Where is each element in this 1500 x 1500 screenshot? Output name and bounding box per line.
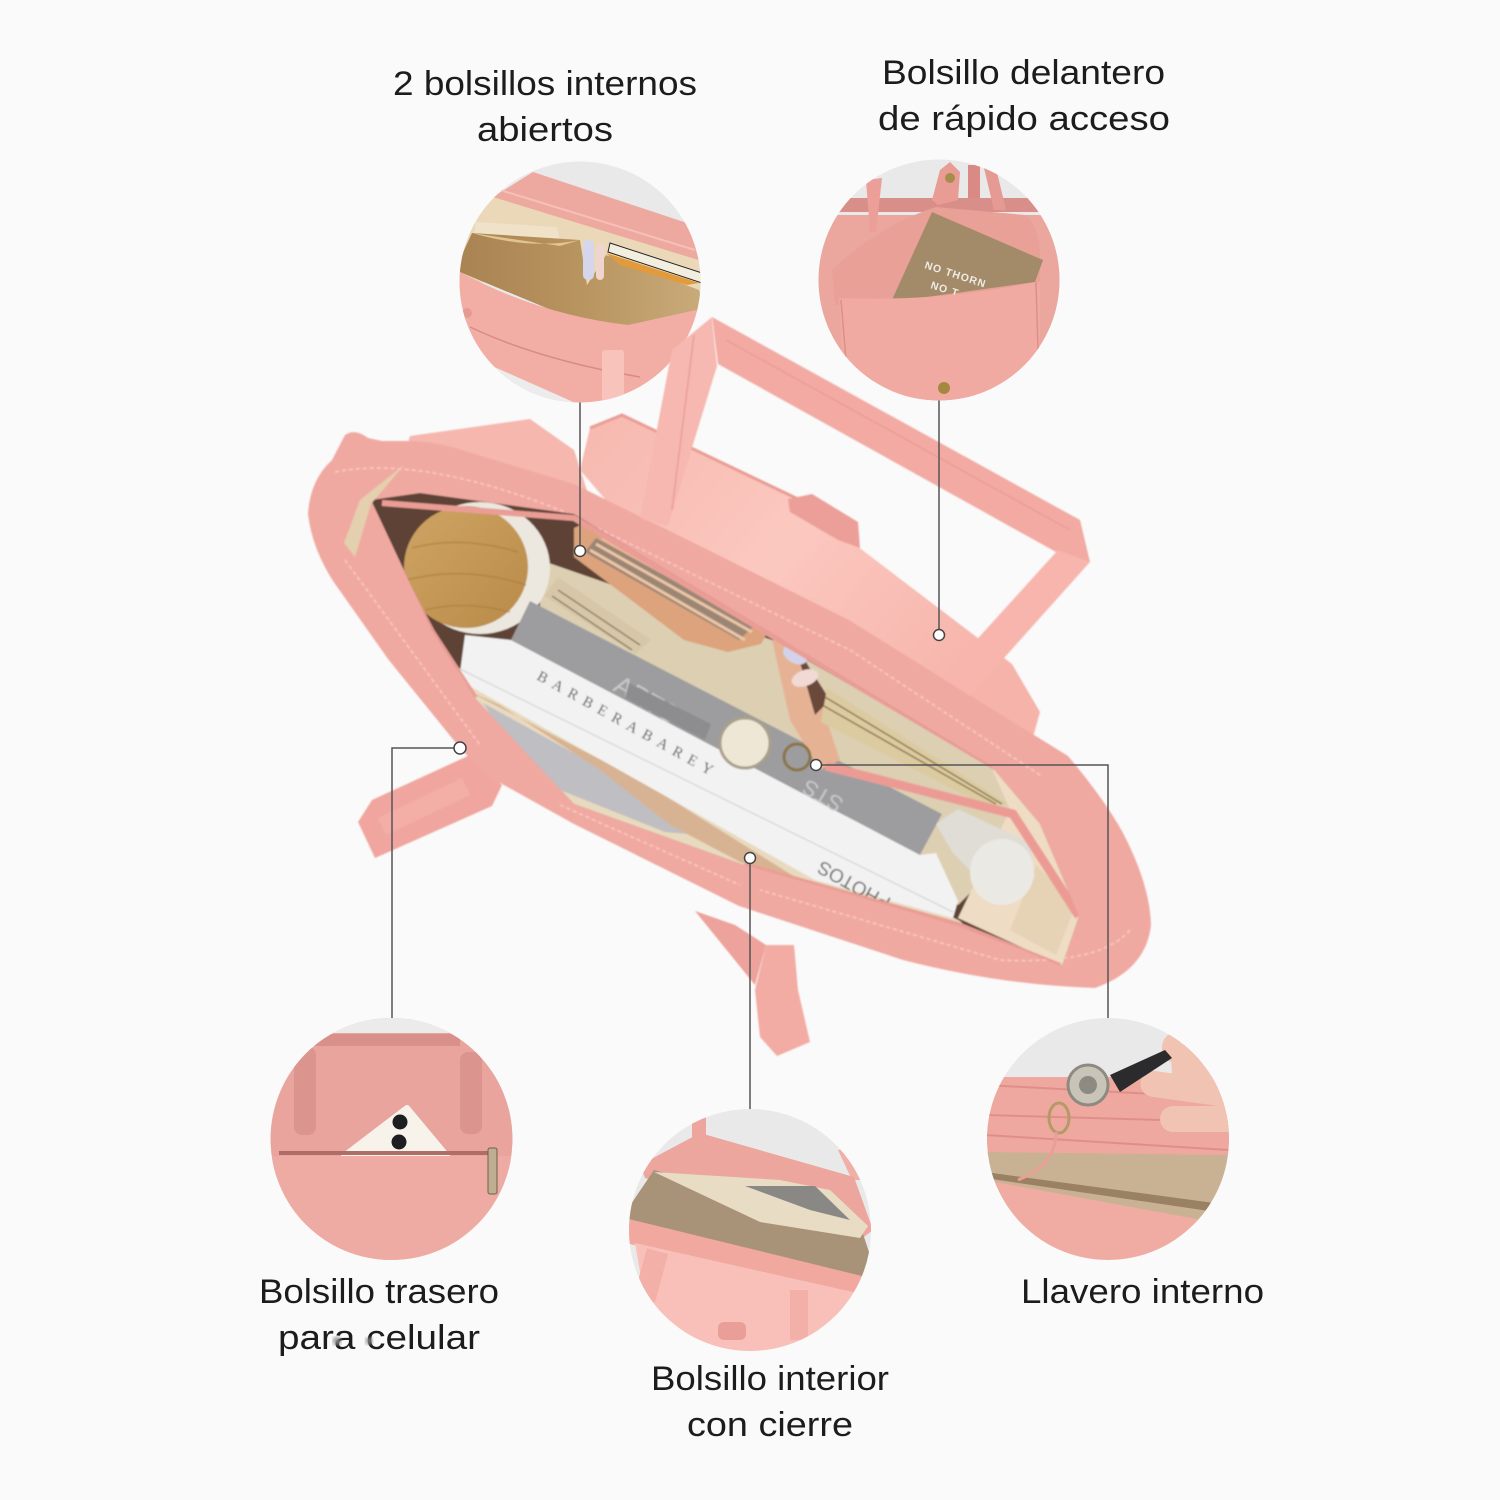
grey book — [511, 601, 942, 855]
line: llavero interno — [816, 765, 1108, 1020]
key ring with charm — [625, 683, 810, 770]
circle: back phone pocket — [265, 1015, 520, 1266]
line: bolsillo delantero — [938, 400, 940, 635]
grey book: STS — [798, 774, 848, 817]
handles — [294, 1047, 316, 1135]
pink wall — [985, 1077, 1235, 1155]
strap: lower left loop — [358, 755, 502, 858]
tan divider — [476, 694, 792, 876]
white book: BARBERABAREY — [534, 669, 722, 782]
strap: upper handle front leg over the circle — [640, 317, 717, 526]
pink rim — [493, 172, 705, 262]
circle: front quick-access pocket — [815, 155, 1065, 410]
line: bolsillo interior — [749, 858, 751, 1110]
pens — [583, 240, 594, 280]
rim stitching — [335, 468, 1130, 961]
circle: open inner pockets — [460, 162, 700, 402]
label: bolsillo interior con cierre: Bolsillo interior — [651, 1360, 889, 1398]
flap — [915, 207, 1024, 215]
zipper tapes — [826, 766, 1079, 916]
tan liner under books — [471, 686, 964, 924]
dark base — [372, 492, 1062, 966]
label: bolsillo trasero para celular: para celular — [278, 1319, 480, 1357]
front pink wall — [460, 272, 698, 402]
label: bolsillo delantero de rapido acceso: Bolsillo delantero — [882, 54, 1165, 92]
line: bolsillo trasero — [392, 748, 454, 1020]
beige interior — [455, 190, 705, 300]
wallet in open pocket — [574, 523, 766, 652]
white bottles — [936, 809, 1035, 905]
brown lining — [455, 233, 705, 328]
orange notebook — [606, 253, 699, 285]
notebooks — [474, 222, 560, 238]
bag interior — [372, 492, 1079, 966]
book: NO T — [929, 279, 960, 300]
grey book: ARTS — [609, 669, 684, 730]
pouch below — [635, 1243, 866, 1360]
strap stub — [692, 1118, 706, 1137]
book — [891, 212, 1043, 302]
label: llavero interno: Llavero interno — [1021, 1273, 1264, 1311]
label: 2 bolsillos internos abiertos: 2 bolsillos internos — [393, 65, 697, 103]
label: 2 bolsillos internos abiertos: abiertos — [477, 111, 613, 149]
label: 2 bolsillos internos abiertos — [393, 65, 697, 149]
buckle flap — [788, 494, 860, 548]
lining right corner — [957, 770, 1080, 966]
white book: PHOTOS — [814, 856, 894, 913]
circle: inner zip pocket — [625, 1105, 875, 1360]
cream pocket — [654, 1172, 868, 1238]
circle: inner key ring — [985, 1015, 1241, 1265]
label: bolsillo delantero de rapido acceso: de rápido acceso — [878, 100, 1170, 138]
marker dots — [454, 546, 944, 864]
clasp — [932, 162, 960, 205]
bag back with straps — [815, 215, 1065, 410]
label: bolsillo interior con cierre — [651, 1360, 889, 1444]
fingers — [1139, 1034, 1241, 1132]
book: NO THORN — [923, 259, 988, 291]
strap: bottom loop — [695, 911, 810, 1056]
callout lines and markers — [392, 400, 1108, 1110]
zipper — [266, 1148, 516, 1266]
cup with wooden lid — [404, 502, 550, 634]
cream folder and pocket fill — [540, 560, 1040, 905]
notebook with spiral — [544, 577, 651, 654]
front wall — [985, 1180, 1229, 1265]
key and ring — [1018, 1050, 1172, 1180]
phone — [344, 1108, 447, 1156]
cream lining flap at left corner — [344, 465, 404, 557]
lining — [985, 1152, 1229, 1227]
strap: upper handle — [712, 317, 1090, 696]
label: bolsillo trasero para celular — [259, 1273, 499, 1357]
white book — [458, 635, 958, 918]
bag rim — [308, 432, 1151, 988]
front wall — [625, 1218, 866, 1295]
silver tablet — [484, 704, 686, 834]
lining — [625, 1170, 875, 1278]
front pouch behind the rim — [400, 415, 1040, 748]
pocket — [839, 282, 1040, 410]
label: bolsillo trasero para celular: Bolsillo trasero — [259, 1273, 499, 1311]
pens and right notebook — [772, 640, 1008, 806]
rim — [640, 1133, 873, 1240]
rivet — [938, 382, 950, 394]
label: bolsillo delantero de rapido acceso — [878, 54, 1170, 138]
label: bolsillo interior con cierre: con cierre — [687, 1406, 853, 1444]
line: 2 bolsillos internos — [579, 400, 581, 551]
main photo: open pink tote bag — [308, 317, 1151, 1056]
